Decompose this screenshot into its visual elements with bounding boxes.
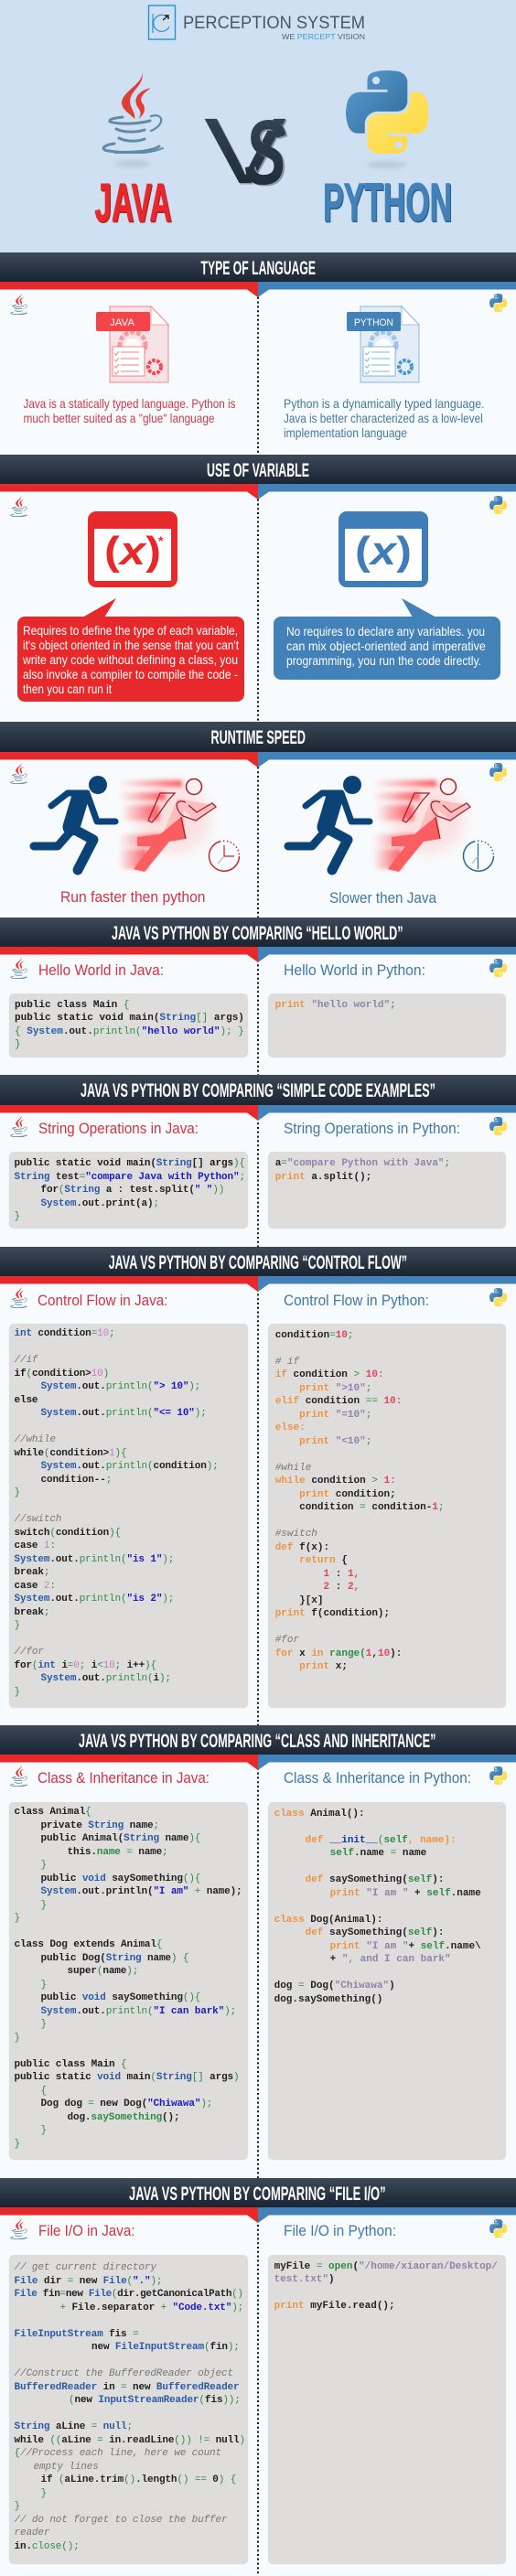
code panel: Class and Inheritance Python: print "I am "+ self.name\ [330, 1941, 481, 1952]
panel: Python file icon [347, 306, 419, 382]
icon: Python logo [346, 70, 429, 168]
code panel: Class and Inheritance Java [9, 1802, 248, 2159]
code panel: Class and Inheritance Java: System.out.println("I can bark"); [40, 2005, 236, 2016]
code panel: Control Flow Python: print "<10"; [299, 1436, 371, 1447]
panel: Java file icon [96, 306, 168, 382]
code panel: String Operations Java: } [15, 1211, 20, 1222]
code panel: Control Flow Java: } [15, 1687, 20, 1698]
code panel: Control Flow Java: break; [15, 1606, 49, 1617]
heading: File I/O in Java: File I/O in Java: [38, 2222, 135, 2239]
heading: Hello World in Java: Hello World in Java: [38, 961, 164, 979]
callout: Java variables: it's object oriented in the sense that you can't [23, 638, 239, 652]
code panel: Class and Inheritance Java: { [40, 2086, 47, 2097]
icon: Java mini [11, 495, 27, 517]
heading: String Operations in Java: String Operations in Java: [38, 1120, 199, 1137]
text: Java speed: Run faster then python [60, 888, 205, 906]
code panel: Control Flow Python: else: [275, 1422, 306, 1433]
code panel: Control Flow Java: } [15, 1487, 20, 1498]
logo: Perception System [148, 5, 365, 41]
code panel: Control Flow Java: //if [15, 1355, 38, 1366]
code panel: File I/O Java: // do not forget to close the buffer [15, 2514, 227, 2525]
icon: Python mini [489, 294, 507, 312]
code panel: Hello World Python [268, 993, 506, 1057]
text: Python typing: Java is better characterized as a low-level [284, 411, 483, 425]
code panel: Control Flow Python: #switch [275, 1529, 317, 1540]
code panel: Class and Inheritance Python: class Dog(Animal): [274, 1914, 382, 1925]
code panel: Control Flow Java: //switch [15, 1514, 61, 1525]
code panel: Class and Inheritance Java: System.out.println("I am" + name); [40, 1886, 242, 1897]
code panel: String Operations Python [268, 1152, 506, 1228]
code panel: File I/O Java: File fin=new File(dir.getCanonicalPath() [15, 2289, 243, 2300]
code panel: File I/O Java: // get current directory [15, 2262, 156, 2273]
section band: Simple Code Examples [0, 1075, 516, 1121]
code panel: File I/O Python: myFile = open("/home/xiaoran/Desktop/ [274, 2261, 498, 2272]
code panel: Control Flow Python: print x; [299, 1661, 348, 1672]
code panel: File I/O Java: in.close(); [15, 2541, 80, 2552]
heading: Control Flow in Java: Control Flow in Java: [38, 1292, 168, 1309]
code panel: Class and Inheritance Python: def saySomething(self): [306, 1874, 444, 1885]
code panel: String Operations Java [9, 1152, 248, 1228]
text: Java typing: much better suited as a "glue" language [24, 411, 215, 425]
callout: Java variables: then you can run it [23, 682, 112, 696]
code panel: File I/O Python: print myFile.read(); [274, 2301, 395, 2312]
code panel: Control Flow Python: # if [275, 1357, 299, 1368]
code panel: String Operations Java: public static void main(String[] args){ [15, 1158, 245, 1169]
code panel: Hello World Java: public static void main(String[] args) [15, 1013, 244, 1024]
code panel: Control Flow Python: print "=10"; [299, 1410, 371, 1421]
code panel: Control Flow Java: } [15, 1620, 20, 1631]
code panel: File I/O Java: reader [15, 2528, 49, 2538]
code panel: Class and Inheritance Java: } [15, 1913, 20, 1924]
logo: Perception System: WE PERCEPT VISION [282, 32, 365, 41]
code panel: Control Flow Python: if condition > 10: [275, 1369, 384, 1380]
heading: Hello World in Python: Hello World in Python: [284, 961, 425, 979]
code panel: File I/O Java: File dir = new File("."); [15, 2276, 162, 2287]
code panel: Class and Inheritance Java: public class Main { [15, 2058, 126, 2069]
code panel: Class and Inheritance Python: print "I am " + self.name [330, 1888, 481, 1899]
code panel: Hello World Java: public class Main { [15, 1000, 129, 1011]
text: Python typing: Python is a dynamically typed language. [284, 396, 485, 411]
code panel: Control Flow Python: for x in range(1,10): [275, 1648, 402, 1659]
code panel: Control Flow Java: condition--; [40, 1475, 112, 1486]
code panel: Class and Inheritance Java: Dog dog = new Dog("Chiwawa"); [40, 2098, 212, 2109]
code panel: Class and Inheritance Java: public void saySomething(){ [40, 1992, 200, 2003]
code panel: Control Flow Python: }[x] [299, 1595, 324, 1606]
icon: Java runners [34, 776, 216, 872]
code panel: File I/O Java: BufferedReader in = new BufferedReader [15, 2382, 240, 2393]
icon: Python mini [489, 1117, 507, 1135]
code panel: String Operations Java: System.out.print(a); [40, 1198, 159, 1209]
code panel: Control Flow Java: System.out.println("is 2"); [15, 1594, 174, 1605]
code panel: Control Flow Python: return { [299, 1555, 348, 1566]
heading: Class and Inheritance in Python: Class & Inheritance in Python: [284, 1769, 471, 1787]
icon: Java variable window [88, 511, 177, 587]
callout: Python variables: can mix object-oriented and imperative [286, 639, 486, 653]
code panel: File I/O Java: if (aLine.trim().length() == 0) { [40, 2474, 236, 2485]
Python wordmark [323, 173, 453, 234]
Java wordmark [95, 174, 172, 234]
code panel: Class and Inheritance Java: } [40, 2125, 47, 2136]
code panel: String Operations Java: String test="compare Java with Python"; [15, 1171, 245, 1182]
section band: File I/O [0, 2178, 516, 2223]
icon: Java mini [11, 1765, 27, 1787]
Java wordmark: JAVA [95, 175, 172, 234]
text: Java typing [24, 396, 236, 425]
icon: Python mini [489, 959, 507, 977]
section band: Control Flow [0, 1247, 516, 1292]
code panel: Class and Inheritance Java: } [15, 2033, 20, 2044]
code panel: Hello World Java [9, 993, 248, 1057]
logo: Perception System: PERCEPTION SYSTEM [183, 13, 365, 33]
code panel: Control Flow Python: print condition; [299, 1489, 396, 1500]
icon: Java mini [11, 762, 27, 784]
icon: Python mini [489, 2219, 507, 2238]
heading: Control Flow in Python: Control Flow in Python: [284, 1292, 429, 1309]
code panel: Control Flow Java: case 2: [15, 1581, 56, 1592]
code panel: Hello World Java: } [15, 1039, 21, 1050]
icon: Java mini [11, 1286, 27, 1308]
callout: Python variables: programming, you run the code directly. [286, 653, 481, 668]
code panel: Control Flow Python: condition=10; [275, 1330, 354, 1341]
text: Python typing: implementation language [284, 425, 407, 440]
code panel: Class and Inheritance Python: class Animal(): [274, 1808, 365, 1819]
center dotted divider [257, 293, 259, 2576]
heading: String Operations in Python: String Operations in Python: [284, 1120, 460, 1137]
icon: Java logo [103, 70, 163, 167]
code panel: Control Flow Java: //while [15, 1434, 56, 1445]
code panel: Control Flow Python [268, 1324, 506, 1707]
code panel: Class and Inheritance Python [268, 1802, 506, 2159]
code panel: Class and Inheritance Java: } [40, 1860, 47, 1871]
code panel: File I/O Java: } [40, 2488, 47, 2499]
icon: Java mini [11, 2217, 27, 2239]
VS emblem: V [204, 99, 286, 203]
header background [0, 0, 516, 253]
code panel: Control Flow Python: print ">10"; [299, 1383, 371, 1394]
code panel: String Operations Python: a="compare Python with Java"; [275, 1158, 450, 1169]
code panel: Control Flow Python: #for [275, 1635, 299, 1646]
code panel: File I/O Java: (new InputStreamReader(fis)); [69, 2395, 241, 2406]
code panel: Class and Inheritance Python: + ", and I can bark" [330, 1954, 451, 1965]
code panel: File I/O Java: {//Process each line, here we count [15, 2448, 221, 2459]
code panel: Class and Inheritance Java: class Animal{ [15, 1807, 91, 1818]
icon: Java variable window: (x) [104, 529, 161, 574]
code panel: File I/O Java: new FileInputStream(fin); [91, 2342, 240, 2353]
VS emblem: S [246, 102, 288, 205]
code panel: String Operations Java: for(String a : test.split(" ")) [40, 1185, 224, 1196]
code panel: Control Flow Java: System.out.println("> 10"); [40, 1381, 200, 1392]
code panel: Control Flow Java: while(condition>1){ [15, 1447, 126, 1458]
code panel: String Operations Python: print a.split(); [275, 1171, 371, 1182]
code panel: Control Flow Python: 1 : 1, [324, 1569, 360, 1580]
code panel: Class and Inheritance Java: public void saySomething(){ [40, 1873, 200, 1884]
panel: Java file icon: JAVA [110, 317, 135, 328]
callout: Java variables: also invoke a compiler to compile the code - [23, 667, 238, 682]
VS emblem: V [205, 101, 287, 205]
section band: Class and Inheritance [0, 1725, 516, 1770]
text: Python typing [284, 396, 485, 440]
code panel: File I/O Java [9, 2255, 248, 2563]
section band: Runtime Speed: RUNTIME SPEED [210, 727, 306, 748]
heading: Class and Inheritance in Java: Class & Inheritance in Java: [38, 1769, 210, 1787]
code panel: Control Flow Java: break; [15, 1567, 49, 1578]
code panel: Control Flow Python: print f(condition); [275, 1608, 390, 1619]
callout: Python variables: No requires to declare any variables. you [286, 624, 485, 639]
code panel: Class and Inheritance Python: def saySomething(self): [306, 1927, 444, 1938]
icon: Java mini [11, 1115, 27, 1137]
code panel: Hello World Java: { System.out.println("hello world"); } [15, 1026, 244, 1037]
code panel: Class and Inheritance Java: class Dog extends Animal{ [15, 1939, 162, 1950]
code panel: Control Flow Java: else [15, 1394, 38, 1405]
icon: Java mini [11, 293, 27, 315]
icon: Python variable window [339, 511, 428, 587]
code panel: Control Flow Java: System.out.println("is 1"); [15, 1553, 174, 1564]
code panel: Control Flow Java: switch(condition){ [15, 1528, 121, 1539]
Java wordmark: JAVA [95, 174, 172, 232]
code panel: Control Flow Java: case 1: [15, 1540, 56, 1551]
code panel: File I/O Java: while ((aLine = in.readLine()) != null) [15, 2435, 245, 2446]
code panel: Control Flow Java [9, 1324, 248, 1707]
panel: Python file icon: PYTHON [354, 317, 393, 328]
callout: Python variables [274, 598, 500, 680]
callout: Java variables: Requires to define the type of each variable, [23, 623, 238, 638]
code panel: Class and Inheritance Python: self.name = name [330, 1848, 426, 1859]
section band: Type of Language: TYPE OF LANGUAGE [201, 258, 316, 279]
code panel: Control Flow Python: while condition > 1: [275, 1476, 396, 1487]
code panel: Hello World Python: print "hello world"; [275, 1000, 396, 1011]
icon: Python mini [489, 1288, 507, 1306]
icon: Python mini [489, 763, 507, 781]
code panel: Control Flow Python: condition = condition-1; [299, 1502, 445, 1513]
section band: Hello World [0, 918, 516, 962]
section band: Type of Language [0, 252, 516, 297]
code panel: File I/O Java: + File.separator + "Code.txt"); [60, 2302, 243, 2313]
code panel: Class and Inheritance Java: public Animal(String name){ [40, 1833, 200, 1844]
text: Python speed: Slower then Java [329, 889, 436, 907]
code panel: Class and Inheritance Java: } [40, 1899, 47, 1910]
code panel: Class and Inheritance Python: def __init__(self, name): [306, 1835, 457, 1846]
icon: Java stopwatch [210, 841, 240, 871]
code panel: File I/O Java: empty lines [33, 2461, 99, 2472]
section band: Use of Variable: USE OF VARIABLE [207, 460, 309, 481]
code panel: Control Flow Python: 2 : 2, [324, 1582, 360, 1593]
code panel: Class and Inheritance Java: public static void main(String[] args) [15, 2072, 240, 2083]
section band: Use of Variable [0, 455, 516, 499]
code panel: File I/O Python: test.txt") [274, 2274, 335, 2285]
code panel: Class and Inheritance Java: } [40, 1980, 47, 1991]
callout: Java variables [17, 598, 244, 702]
code panel: Control Flow Java: System.out.println("<= 10"); [40, 1408, 207, 1419]
section band: Runtime Speed [0, 722, 516, 767]
VS emblem: S [244, 102, 286, 204]
code panel: Class and Inheritance Java: private String name; [40, 1820, 159, 1831]
code panel: File I/O Java: String aLine = null; [15, 2421, 133, 2432]
callout: Java variables: write any code without defining a class, you [22, 652, 238, 667]
code panel: Control Flow Java: int condition=10; [15, 1328, 115, 1339]
code panel: Control Flow Java: //for [15, 1647, 44, 1658]
code panel: File I/O Python [268, 2255, 506, 2563]
icon: Python runners [288, 776, 470, 872]
code panel: Control Flow Python: #while [275, 1463, 311, 1474]
text: Java typing: Java is a statically typed language. Python is [24, 396, 236, 411]
code panel: Control Flow Java: System.out.println(i); [40, 1673, 171, 1684]
code panel: Control Flow Python: def f(x): [275, 1542, 329, 1553]
heading: File I/O in Python: File I/O in Python: [284, 2222, 396, 2239]
code panel: Class and Inheritance Java: this.name = name; [68, 1846, 168, 1857]
icon: Java mini [11, 957, 27, 979]
icon: Python variable window: (x) [355, 529, 412, 574]
code panel: File I/O Java: } [15, 2501, 20, 2512]
icon: Python mini [489, 1766, 507, 1785]
code panel: Control Flow Java: if(condition>10) [15, 1368, 109, 1379]
code panel: File I/O Java: //Construct the BufferedReader object [15, 2368, 233, 2379]
code panel: Class and Inheritance Java: public Dog(String name) { [40, 1952, 188, 1963]
code panel: Class and Inheritance Python: dog.saySomething() [274, 1994, 382, 2005]
code panel: Class and Inheritance Java: } [40, 2019, 47, 2030]
icon: Python mini [489, 496, 507, 514]
icon: Java variable window: * [158, 533, 164, 548]
code panel: Control Flow Java: for(int i=0; i<10; i++){ [15, 1659, 156, 1670]
code panel: Class and Inheritance Python: dog = Dog("Chiwawa") [274, 1980, 395, 1991]
code panel: File I/O Java: FileInputStream fis = [15, 2329, 138, 2340]
code panel: Class and Inheritance Java: } [15, 2139, 20, 2150]
code panel: Control Flow Python: elif condition == 10: [275, 1396, 402, 1407]
code panel: Class and Inheritance Java: super(name); [68, 1966, 138, 1977]
code panel: Control Flow Java: System.out.println(condition); [40, 1461, 219, 1472]
code panel: Class and Inheritance Java: dog.saySomething(); [68, 2111, 179, 2122]
icon: Python stopwatch [464, 841, 494, 871]
